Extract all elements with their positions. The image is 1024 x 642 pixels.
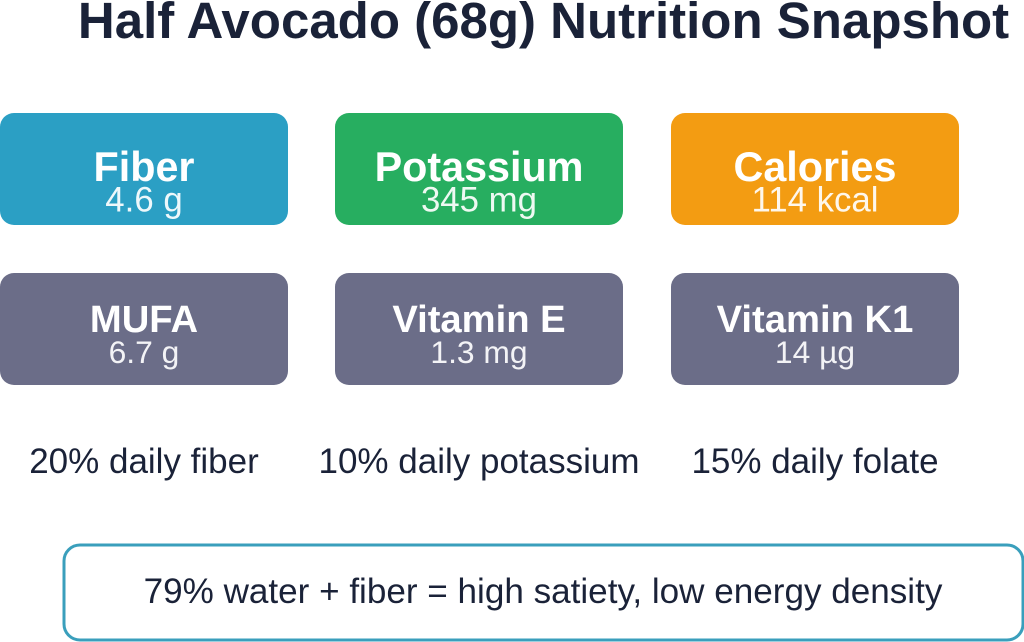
card: vitamin E: 1.3 mg [430, 334, 528, 370]
card: MUFA [0, 273, 288, 385]
card: vitamin K1: 14 µg [775, 334, 855, 370]
card: potassium [335, 113, 623, 225]
callout: 79% water + fiber = high satiety, low energy density [144, 572, 943, 611]
card: fiber: Fiber [94, 144, 194, 190]
card: potassium: Potassium [375, 144, 583, 190]
card: vitamin K1 [671, 273, 959, 385]
card: calories: 114 kcal [751, 180, 879, 220]
callout [64, 545, 1023, 640]
card: potassium: 345 mg [421, 180, 537, 220]
card: vitamin E: Vitamin E [392, 298, 566, 341]
note: daily folate: 15% daily folate [691, 442, 939, 481]
card: vitamin K1: Vitamin K1 [717, 298, 913, 341]
card: MUFA: MUFA [90, 298, 198, 341]
card: vitamin E [335, 273, 623, 385]
card: fiber: 4.6 g [105, 180, 183, 220]
card: fiber [0, 113, 288, 225]
card: calories: Calories [734, 144, 896, 190]
card: MUFA: 6.7 g [109, 334, 179, 370]
note: daily potassium: 10% daily potassium [318, 442, 640, 481]
note: daily fiber: 20% daily fiber [29, 442, 259, 481]
card: calories [671, 113, 959, 225]
